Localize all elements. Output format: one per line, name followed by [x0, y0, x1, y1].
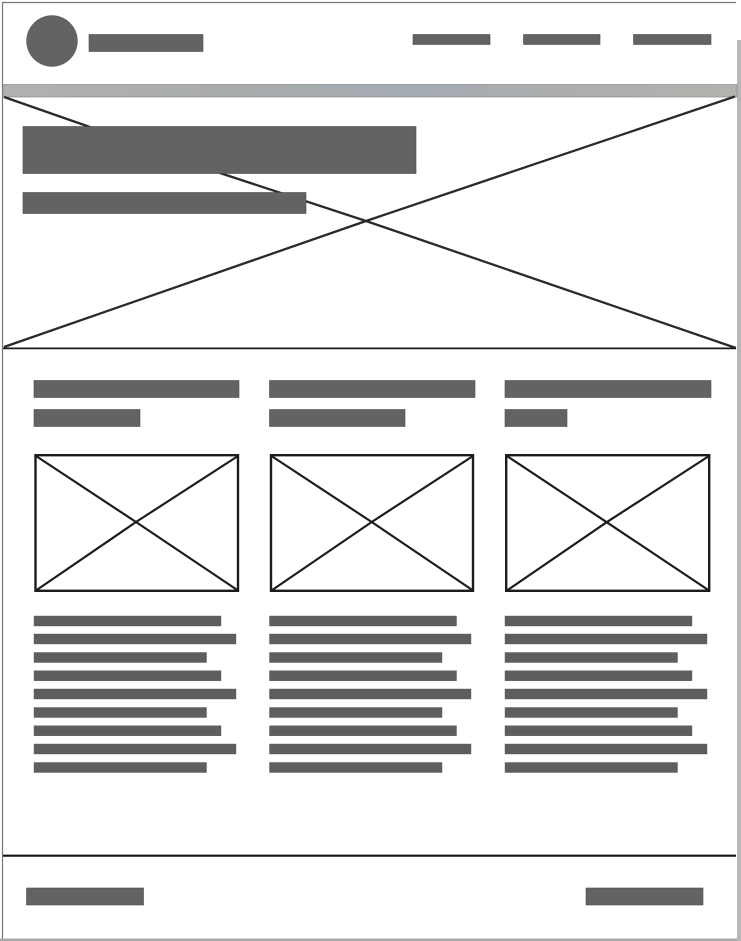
navigation item 3 — [634, 34, 711, 44]
hero heading bar — [23, 126, 416, 174]
column 1 image placeholder — [36, 455, 238, 591]
column 2 text lines — [270, 616, 471, 772]
footer right bar — [586, 888, 703, 905]
footer divider line — [3, 855, 736, 857]
column 2 image placeholder — [271, 455, 473, 591]
column 3 image placeholder — [506, 455, 709, 591]
hero panel — [3, 96, 736, 348]
column 2 — [270, 380, 475, 772]
footer — [3, 856, 736, 905]
column 1 — [34, 380, 239, 772]
column 2 heading — [270, 380, 475, 426]
column 1 text lines — [34, 616, 236, 772]
hero subheading bar — [23, 192, 306, 214]
hero image placeholder — [3, 96, 736, 348]
logo circle — [26, 15, 78, 67]
header — [26, 15, 711, 67]
navigation item 2 — [524, 34, 600, 44]
column 1 heading — [34, 380, 239, 426]
column 3 heading — [505, 380, 711, 426]
column 3 text lines — [505, 616, 707, 772]
column 3 — [505, 380, 711, 772]
header divider band — [3, 84, 737, 97]
navigation item 1 — [413, 34, 490, 44]
logo wordmark bar — [89, 34, 203, 52]
footer left bar — [26, 888, 144, 905]
